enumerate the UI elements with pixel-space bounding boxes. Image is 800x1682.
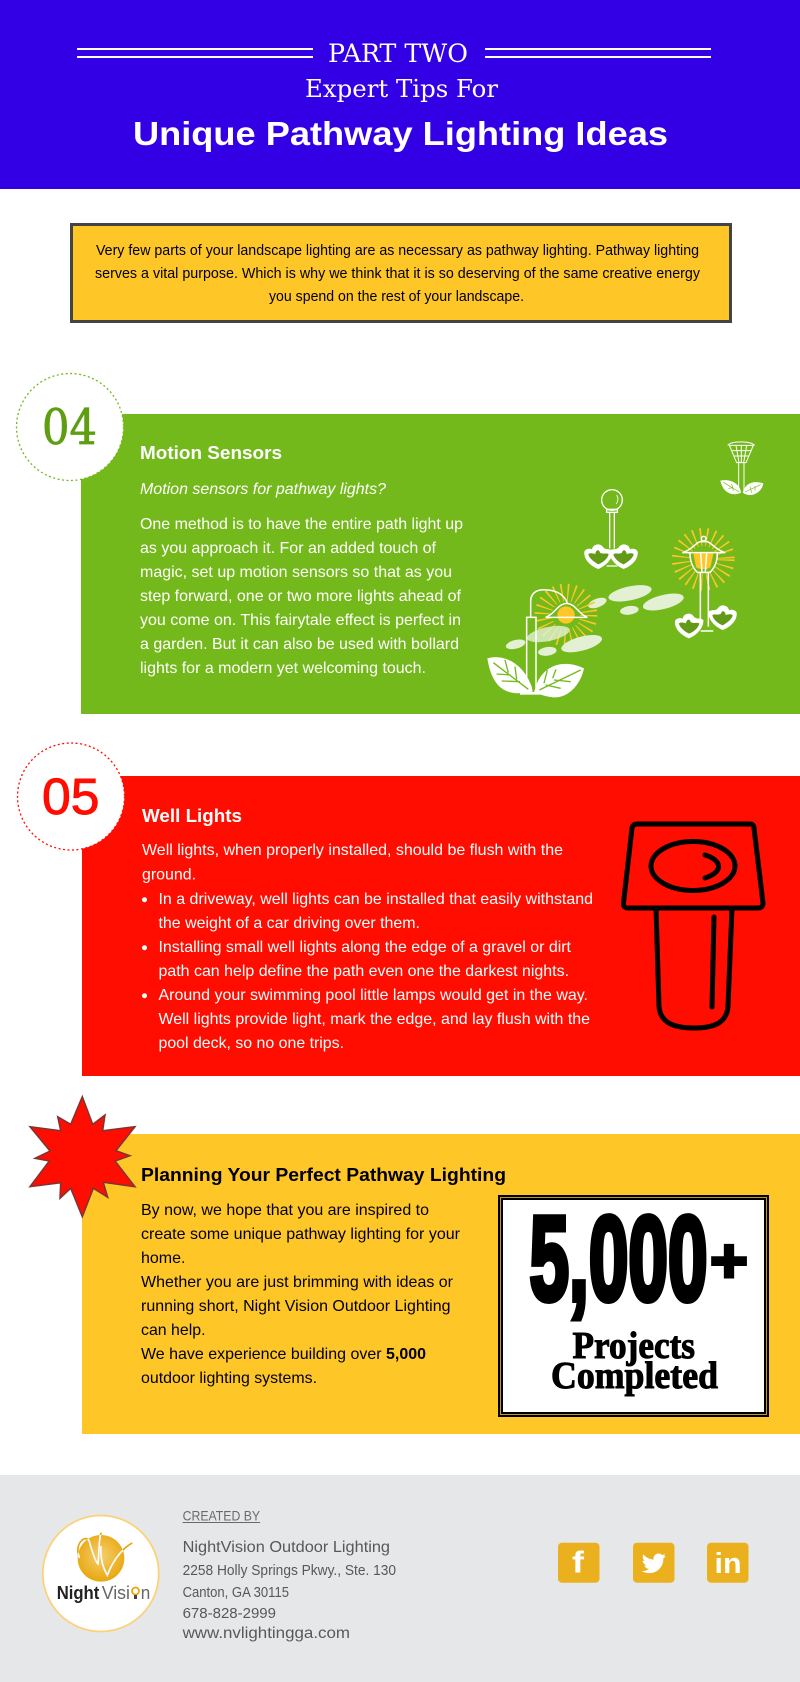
badge: 05 xyxy=(18,743,124,850)
created by: CREATED BY xyxy=(183,1508,261,1524)
icon: facebook xyxy=(558,1543,600,1583)
company details: Canton, GA 30115 xyxy=(183,1585,289,1601)
body text: Whether you are just brimming with ideas or xyxy=(141,1274,454,1291)
leaves: left lamp xyxy=(487,657,584,697)
intro callout: serves a vital purpose. Which is why we think that it is so deserving of the same creative energy xyxy=(95,266,701,282)
body text: home. xyxy=(141,1250,186,1267)
body text and bullets: Well lights, when properly installed, should be flush with the xyxy=(142,842,563,859)
body text: step forward, one or two more lights ahead of xyxy=(140,588,462,605)
panel: motion sensors xyxy=(16,374,800,714)
company details: www.nvlightingga.com xyxy=(182,1625,350,1642)
logo: night vision: Night xyxy=(57,1582,99,1603)
header banner xyxy=(0,0,800,189)
body text: running short, Night Vision Outdoor Lighting xyxy=(141,1298,450,1315)
footprints lower xyxy=(505,623,604,657)
body text and bullets: path can help define the path even one the darkest nights. xyxy=(158,963,569,980)
icon: linkedin xyxy=(707,1543,748,1583)
icon: linkedin: in xyxy=(714,1548,742,1580)
lamp: lantern right xyxy=(675,536,737,638)
body text: We have experience building over 5,000 xyxy=(141,1346,426,1363)
logo: night vision: Visi xyxy=(102,1582,130,1603)
illustration: path lights and footsteps xyxy=(487,442,763,697)
intro callout: Very few parts of your landscape lighting are as necessary as pathway lighting. Pathway lighting xyxy=(96,243,699,259)
logo: night vision: n xyxy=(141,1582,150,1603)
header: expert tips for: Expert Tips For xyxy=(305,75,499,103)
body text and bullets: pool deck, so no one trips. xyxy=(158,1035,344,1052)
footer xyxy=(0,1475,800,1682)
stat box: 5,000+ projects completed: Completed xyxy=(551,1355,718,1397)
badge: 05: 05 xyxy=(42,768,100,825)
company details: 2258 Holly Springs Pkwy., Ste. 130 xyxy=(183,1563,396,1579)
panel: well lights xyxy=(18,743,800,1076)
stat box: 5,000+ projects completed: Projects xyxy=(572,1325,695,1367)
body text and bullets: ground. xyxy=(142,866,196,884)
body text: lights for a modern yet welcoming touch. xyxy=(140,660,426,677)
body text: create some unique pathway lighting for your xyxy=(141,1226,461,1243)
company details: 678-828-2999 xyxy=(183,1606,276,1622)
heading: well lights: Well Lights xyxy=(142,806,242,826)
body text xyxy=(140,516,463,677)
footprints upper xyxy=(587,582,685,616)
body text: you come on. This fairytale effect is perfect in xyxy=(140,612,461,629)
header: part two: PART TWO xyxy=(328,39,468,68)
body text: can help. xyxy=(141,1322,206,1339)
badge: 04: 04 xyxy=(42,399,97,456)
body text: outdoor lighting systems. xyxy=(141,1370,317,1387)
stat box: 5,000+ projects completed: + xyxy=(710,1227,748,1296)
heading: planning: Planning Your Perfect Pathway Lighting xyxy=(141,1165,506,1185)
icon: red starburst xyxy=(30,1097,135,1217)
stat box: 5,000+ projects completed xyxy=(498,1192,769,1417)
lamp: globe middle xyxy=(584,490,638,569)
body text and bullets: Installing small well lights along the edge of a gravel or dirt xyxy=(158,939,572,956)
badge: 04 xyxy=(16,374,124,480)
lamp: basket top right xyxy=(720,442,763,495)
body text and bullets: Around your swimming pool little lamps would get in the way. xyxy=(158,987,588,1004)
body text and bullets xyxy=(142,842,593,1052)
title: Unique Pathway Lighting Ideas xyxy=(133,115,668,152)
body text xyxy=(141,1202,461,1387)
body text and bullets: In a driveway, well lights can be installed that easily withstand xyxy=(158,891,593,908)
heading: motion sensors: Motion Sensors xyxy=(140,443,282,463)
body text: a garden. But it can also be used with bollard xyxy=(140,636,459,653)
body text: as you approach it. For an added touch of xyxy=(140,540,437,557)
rays: left lamp xyxy=(543,592,589,638)
subheading: Motion sensors for pathway lights? xyxy=(140,481,386,498)
intro callout: you spend on the rest of your landscape. xyxy=(269,289,524,305)
company details xyxy=(182,1539,396,1642)
body text: One method is to have the entire path light up xyxy=(140,516,463,533)
icon: twitter xyxy=(633,1543,674,1583)
company details: NightVision Outdoor Lighting xyxy=(183,1539,390,1556)
body text and bullets: Well lights provide light, mark the edge, and lay flush with the xyxy=(158,1011,590,1028)
body text: By now, we hope that you are inspired to xyxy=(141,1202,429,1219)
intro callout xyxy=(72,224,730,322)
panel: planning your perfect pathway lighting xyxy=(30,1097,800,1434)
lamp: arched left xyxy=(527,590,587,693)
icon: well light xyxy=(623,824,763,1028)
body text and bullets: the weight of a car driving over them. xyxy=(158,915,420,932)
body text: magic, set up motion sensors so that as you xyxy=(140,564,452,581)
icon: facebook: f xyxy=(572,1545,585,1580)
logo: night vision xyxy=(43,1516,159,1632)
